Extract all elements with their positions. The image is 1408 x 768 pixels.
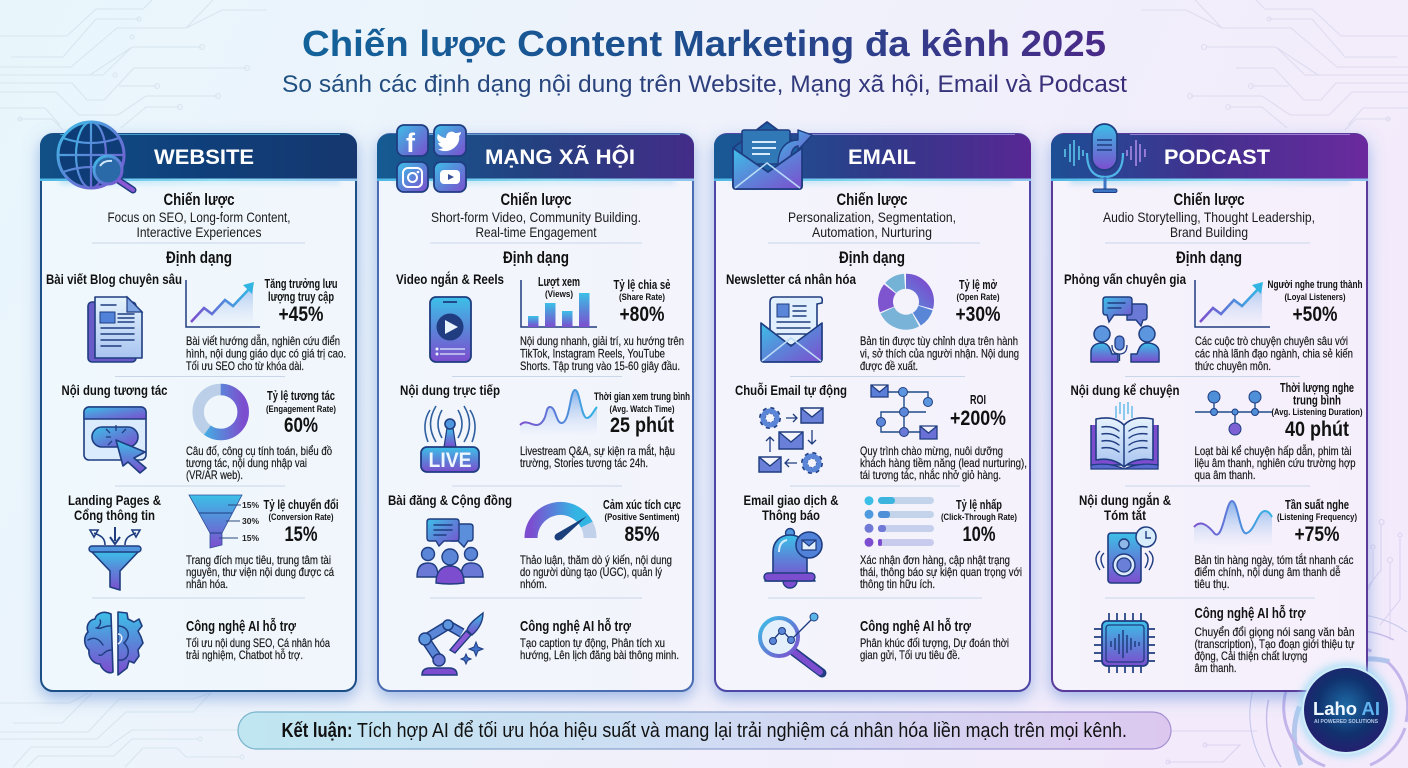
- icon: audio chip: [1094, 613, 1155, 673]
- metric: (Conversion Rate): [268, 512, 334, 523]
- icon: live broadcast: LIVE: [428, 449, 472, 472]
- strategy text: Short-form Video, Community Building.: [431, 209, 641, 225]
- icon: open envelope with arrow: [733, 122, 812, 189]
- metric: Tỷ lệ chia sẻ: [614, 278, 671, 292]
- description: Shorts. Tập trung vào 15-60 giây đầu.: [520, 359, 680, 373]
- header bar: [714, 134, 1031, 181]
- metric: [956, 278, 1001, 326]
- description: [860, 444, 1027, 482]
- description: thái, thông báo sự kiện quan trọng với: [860, 565, 1022, 579]
- item title: Chuỗi Email tự động: [735, 382, 847, 398]
- item: community: [388, 492, 681, 591]
- item title: Nội dung trực tiếp: [400, 382, 500, 398]
- header bar: [1051, 134, 1368, 181]
- AI support: [760, 613, 1009, 673]
- description: [1194, 443, 1356, 482]
- metric: (Click-Through Rate): [941, 512, 1017, 523]
- item title: Landing Pages &: [68, 492, 161, 508]
- subtitle: So sánh các định dạng nội dung trên Website, Mạng xã hội, Email và Podcast: [282, 71, 1127, 98]
- metric: Tỷ lệ tương tác: [267, 389, 335, 403]
- metric: +200%: [950, 407, 1006, 430]
- description: do người dùng tạo (UGC), quản lý: [520, 565, 662, 579]
- strategy text: Audio Storytelling, Thought Leadership,: [1103, 209, 1315, 225]
- AI heading: Công nghệ AI hỗ trợ: [1194, 605, 1306, 622]
- metric: (Loyal Listeners): [1284, 292, 1346, 303]
- icon: click window: [84, 407, 146, 473]
- logo badge: AI POWERED SOLUTIONS: [1314, 719, 1379, 725]
- AI support: [419, 613, 679, 675]
- description: Trang đích mục tiêu, trung tâm tài: [186, 553, 331, 567]
- strategy text: Focus on SEO, Long-form Content,: [108, 209, 290, 225]
- item: live: [400, 382, 690, 472]
- format heading: Định dạng: [1176, 249, 1242, 267]
- conclusion banner: Tích hợp AI để tối ưu hóa hiệu suất và mang lại trải nghiệm cá nhân hóa liền mạch trên mọi kênh.: [357, 720, 1127, 742]
- header label: MẠNG XÃ HỘI: [485, 145, 635, 169]
- description: [520, 334, 684, 373]
- description: nhân hóa.: [186, 577, 228, 591]
- metric: 15%: [284, 523, 318, 546]
- conclusion banner: Kết luận:: [282, 720, 352, 742]
- strategy text: Personalization, Segmentation,: [788, 209, 956, 225]
- AI description: động, Cải thiện chất lượng: [1194, 649, 1308, 663]
- segmented donut chart: [877, 273, 935, 331]
- metric: [264, 277, 338, 326]
- timeline chart: [1195, 391, 1272, 435]
- metric: (Listening Frequency): [1277, 512, 1357, 523]
- description: vi, sở thích của người nhận. Nội dung: [860, 346, 1019, 360]
- item title: Phỏng vấn chuyên gia: [1064, 271, 1186, 287]
- AI support: [1094, 605, 1354, 675]
- conclusion banner: [238, 712, 1171, 749]
- description: nguyên, thư viện nội dung được cá: [186, 565, 334, 579]
- funnel chart: 15%: [242, 533, 259, 543]
- item: interactive: [62, 382, 336, 482]
- icon: funnel: [89, 527, 141, 590]
- panel: social: [377, 125, 694, 691]
- icon: community: [417, 519, 483, 584]
- panel: email: [714, 122, 1031, 691]
- metric: [594, 391, 690, 437]
- strategy heading: Chiến lược: [836, 191, 908, 209]
- strategy text: [431, 209, 641, 240]
- header label: EMAIL: [848, 146, 916, 169]
- description: trường, Stories tương tác 24h.: [520, 456, 648, 470]
- icon: email automation loop: [759, 408, 823, 472]
- panel: podcast: [1051, 124, 1368, 691]
- metric: [264, 498, 338, 546]
- description: Câu đố, công cụ tính toán, biểu đồ: [186, 444, 332, 458]
- AI description: Tối ưu nội dung SEO, Cá nhân hóa: [186, 636, 330, 650]
- description: Loạt bài kể chuyện hấp dẫn, phim tài: [1194, 443, 1352, 458]
- icon: social network tiles: f: [406, 128, 416, 158]
- metric: [614, 278, 671, 326]
- format heading: Định dạng: [166, 249, 232, 267]
- format heading: Định dạng: [503, 249, 569, 267]
- metric: [603, 498, 681, 546]
- logo badge: [1299, 663, 1393, 757]
- gauge chart: [531, 508, 590, 540]
- metric: 85%: [624, 523, 660, 546]
- metric: +45%: [278, 303, 324, 326]
- metric: +80%: [620, 303, 665, 326]
- line chart: [186, 280, 260, 327]
- item: short video: [396, 270, 684, 373]
- item: blog: [46, 271, 346, 373]
- icon: interview: [1091, 297, 1159, 362]
- description: Thảo luận, thăm dò ý kiến, nội dung: [520, 553, 672, 567]
- metric: +30%: [956, 303, 1001, 326]
- description: được đề xuất.: [860, 359, 918, 373]
- item title: Tóm tắt: [1104, 506, 1146, 523]
- description: điểm chính, nội dung âm thanh dễ: [1194, 564, 1341, 579]
- description: Các cuộc trò chuyện chuyên sâu với: [1195, 334, 1348, 348]
- icon: live broadcast: [421, 406, 479, 472]
- metric: 60%: [284, 414, 318, 437]
- description: [860, 334, 1019, 373]
- metric: (Positive Sentiment): [604, 512, 680, 523]
- description: [186, 333, 346, 373]
- metric: [1268, 279, 1363, 326]
- metric: Tần suất nghe: [1285, 498, 1349, 512]
- item title: Bài đăng & Cộng đồng: [388, 492, 512, 508]
- strategy text: Real-time Engagement: [476, 224, 597, 240]
- metric: +50%: [1292, 303, 1338, 326]
- bar chart: [521, 275, 597, 327]
- panel card: [715, 134, 1030, 691]
- description: Xác nhận đơn hàng, cập nhật trạng: [860, 553, 1010, 567]
- description: (VR/AR web).: [186, 468, 243, 482]
- AI description: [186, 636, 330, 662]
- description: tiêu thụ.: [1194, 577, 1230, 591]
- funnel chart: 15%: [242, 500, 259, 510]
- item title: Nội dung kể chuyện: [1070, 382, 1180, 398]
- funnel chart: 30%: [242, 516, 259, 526]
- description: qua âm thanh.: [1194, 468, 1256, 482]
- item: interview: [1064, 271, 1363, 373]
- metric: (Open Rate): [956, 292, 1000, 303]
- item title: Newsletter cá nhân hóa: [726, 271, 856, 287]
- metric: 40 phút: [1285, 418, 1349, 441]
- panel card: [1052, 134, 1367, 691]
- description: thông tin hữu ích.: [860, 577, 935, 591]
- icon: newsletter envelope: [761, 297, 822, 362]
- metric: 25 phút: [610, 414, 674, 437]
- metric: [941, 498, 1017, 546]
- description: tương tác, nội dung nhập vai: [186, 456, 307, 470]
- header label: WEBSITE: [154, 146, 254, 169]
- strategy heading: Chiến lược: [500, 191, 572, 209]
- item: landing pages: [68, 492, 338, 591]
- strategy text: [108, 209, 290, 240]
- metric: +75%: [1294, 523, 1340, 546]
- title: Chiến lược Content Marketing đa kênh 2025: [302, 23, 1106, 64]
- metric: trung bình: [1293, 394, 1341, 408]
- panel: website: [40, 122, 357, 691]
- description: [520, 443, 675, 470]
- strategy text: [1103, 209, 1315, 240]
- icon: analytics magnifier: [760, 613, 822, 673]
- strategy text: Interactive Experiences: [136, 224, 262, 240]
- strategy heading: Chiến lược: [164, 191, 234, 209]
- item: automation: [735, 382, 1027, 482]
- progress bars: [864, 496, 934, 547]
- metric: [1277, 498, 1357, 546]
- metric: lượng truy cập: [268, 290, 334, 304]
- AI heading: Công nghệ AI hỗ trợ: [520, 618, 631, 635]
- metric: Tỷ lệ nhấp: [956, 498, 1002, 512]
- description: Bản tin được tùy chỉnh dựa trên hành: [860, 334, 1018, 348]
- AI description: âm thanh.: [1194, 661, 1236, 675]
- panel card: [41, 134, 356, 691]
- item title: Cổng thông tin: [74, 507, 155, 523]
- icon: document: [88, 297, 142, 362]
- bar chart: Lượt xem: [538, 275, 580, 289]
- description: Tối ưu SEO cho từ khóa dài.: [186, 359, 304, 373]
- header label: PODCAST: [1164, 146, 1270, 169]
- AI description: gian gửi, Tối ưu tiêu đề.: [860, 648, 960, 662]
- description: Bài viết hướng dẫn, nghiên cứu điển: [186, 333, 340, 348]
- item title: [744, 492, 838, 523]
- format heading: Định dạng: [839, 249, 905, 267]
- item title: [1079, 491, 1171, 523]
- icon: microphone: [1065, 124, 1145, 192]
- item title: Nội dung ngắn &: [1079, 491, 1171, 508]
- metric: (Avg. Listening Duration): [1272, 407, 1362, 418]
- description: [186, 444, 332, 482]
- description: hình, nội dung giáo dục có giá trị cao.: [186, 346, 346, 360]
- metric: Người nghe trung thành: [1268, 279, 1363, 291]
- description: khách hàng tiềm năng (lead nurturing),: [860, 456, 1027, 470]
- strategy heading: Chiến lược: [1174, 191, 1244, 209]
- AI heading: Công nghệ AI hỗ trợ: [186, 618, 296, 635]
- description: [520, 553, 672, 591]
- workflow diagram: [871, 385, 937, 439]
- metric: (Avg. Watch Time): [610, 404, 674, 415]
- item title: Nội dung tương tác: [62, 382, 168, 398]
- description: thức chuyên môn.: [1195, 359, 1271, 373]
- wave chart: [1194, 501, 1272, 545]
- metric: [1272, 381, 1362, 441]
- description: liệu âm thanh, nghiên cứu trường hợp: [1194, 456, 1356, 470]
- AI description: hướng, Lên lịch đăng bài thông minh.: [520, 648, 679, 662]
- metric: [266, 389, 336, 437]
- wave chart: [520, 390, 597, 435]
- header bar: [40, 134, 357, 181]
- icon: social network tiles: [397, 125, 466, 192]
- icon: phone: [430, 297, 471, 362]
- metric: (Engagement Rate): [266, 404, 336, 415]
- metric: Tỷ lệ mở: [959, 278, 997, 292]
- AI description: [860, 636, 1009, 662]
- item title: [68, 492, 161, 523]
- description: [186, 553, 334, 591]
- AI description: Tạo caption tự động, Phân tích xu: [520, 636, 665, 650]
- item: short content: [1079, 491, 1357, 591]
- metric: Tăng trưởng lưu: [264, 277, 338, 291]
- item: storytelling: [1070, 381, 1362, 482]
- funnel chart: [189, 495, 259, 548]
- donut chart: 60%: [198, 390, 243, 434]
- icon: open book: [1091, 402, 1158, 469]
- strategy text: [788, 209, 956, 240]
- AI description: Chuyển đổi giọng nói sang văn bản: [1194, 625, 1354, 639]
- description: [1195, 334, 1353, 373]
- metric: Thời gian xem trung bình: [594, 391, 690, 403]
- description: Nội dung nhanh, giải trí, xu hướng trên: [520, 334, 684, 348]
- header bar: [377, 134, 694, 181]
- metric: Cảm xúc tích cực: [603, 498, 681, 512]
- icon: robot arm: [419, 613, 483, 675]
- description: nhóm.: [520, 577, 547, 591]
- description: [860, 553, 1022, 591]
- strategy text: Brand Building: [1170, 224, 1248, 240]
- metric: 10%: [962, 523, 996, 546]
- icon: brain and gear: [85, 612, 143, 675]
- bar chart: (Views): [545, 289, 573, 300]
- description: Livestream Q&A, sự kiện ra mắt, hậu: [520, 443, 675, 458]
- metric: Thời lượng nghe: [1280, 381, 1354, 395]
- panel card: [378, 134, 693, 691]
- metric: (Share Rate): [619, 292, 665, 303]
- metric: [950, 393, 1006, 430]
- description: tái tương tác, nhắc nhở giỏ hàng.: [860, 467, 1001, 482]
- icon: globe with magnifier: [58, 122, 133, 190]
- description: [1194, 552, 1354, 591]
- AI description: trải nghiệm, Chatbot hỗ trợ.: [186, 647, 303, 662]
- description: các nhà lãnh đạo ngành, chia sẻ kiến: [1195, 346, 1353, 360]
- item: transactional: [744, 492, 1022, 591]
- AI description: [1194, 625, 1354, 675]
- AI heading: Công nghệ AI hỗ trợ: [860, 618, 971, 635]
- AI description: (transcription), Tạo đoạn giới thiệu tự: [1194, 637, 1354, 651]
- item: newsletter: [726, 271, 1019, 373]
- logo badge: Laho AI: [1313, 699, 1380, 719]
- metric: Tỷ lệ chuyển đổi: [264, 498, 338, 512]
- strategy text: Automation, Nurturing: [812, 224, 932, 240]
- line chart: [1195, 280, 1270, 327]
- icon: bell: [764, 528, 822, 588]
- description: Bản tin hàng ngày, tóm tắt nhanh các: [1194, 552, 1354, 567]
- item title: Video ngắn & Reels: [396, 270, 504, 287]
- description: Quy trình chào mừng, nuôi dưỡng: [860, 444, 1003, 458]
- AI description: Phân khúc đối tượng, Dự đoán thời: [860, 636, 1009, 650]
- item title: Email giao dịch &: [744, 492, 838, 508]
- AI description: [520, 636, 679, 662]
- description: TikTok, Instagram Reels, YouTube: [520, 346, 665, 360]
- item title: Bài viết Blog chuyên sâu: [46, 271, 182, 287]
- metric: ROI: [970, 393, 986, 407]
- AI support: [85, 612, 330, 675]
- icon: speaker with clock: [1096, 527, 1156, 583]
- item title: Thông báo: [762, 507, 820, 523]
